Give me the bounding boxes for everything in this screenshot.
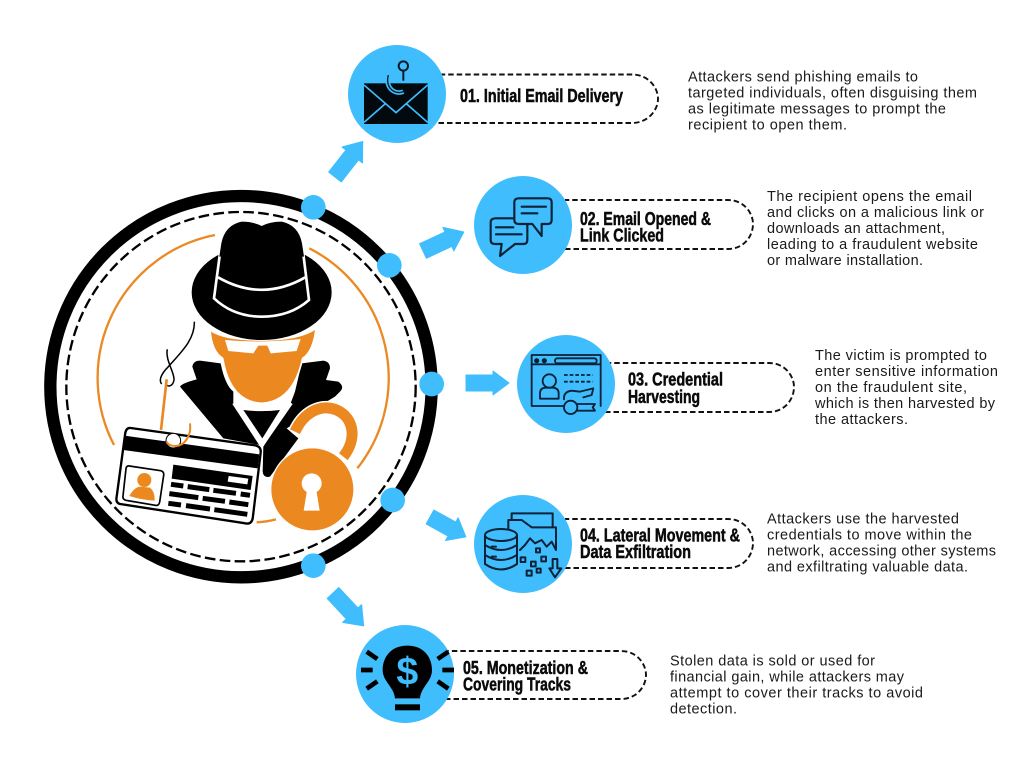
description 1: recipient to open them. [688, 118, 847, 134]
icon: dollar lightbulb: $ [396, 650, 418, 694]
description 4: Attackers use the harvested [767, 512, 959, 528]
description 5: attempt to cover their tracks to avoid [670, 686, 923, 702]
description 1: targeted individuals, often disguising them [688, 86, 977, 102]
heading 3: 03. Credential [628, 370, 723, 390]
description 3: the attackers. [815, 412, 908, 428]
heading pill 2 [565, 200, 753, 249]
description 5: detection. [670, 702, 737, 718]
description 2: downloads an attachment, [767, 221, 945, 237]
description 4: credentials to move within the [767, 528, 972, 544]
heading 4: 04. Lateral Movement & [580, 526, 740, 546]
description 5: Stolen data is sold or used for [670, 654, 875, 670]
heading pill 5 [445, 651, 646, 699]
heading 5 [463, 658, 588, 694]
heading 4: Data Exfiltration [580, 542, 691, 562]
description 2: leading to a fraudulent website [767, 237, 978, 253]
open padlock [271, 408, 354, 531]
description 5 [670, 654, 923, 718]
arrow: to step 2 [418, 220, 469, 263]
panel: central hacker emblem [50, 195, 444, 578]
heading 5: 05. Monetization & [463, 658, 588, 678]
heading 5: Covering Tracks [463, 674, 571, 694]
hacker figure [180, 222, 342, 477]
description 4: and exfiltrating valuable data. [767, 560, 968, 576]
heading 4 [580, 526, 740, 562]
description 5: financial gain, while attackers may [670, 670, 905, 686]
arrow: to step 4 [424, 506, 472, 548]
heading pill 3 [605, 363, 794, 412]
icon: login window and keys [517, 335, 615, 433]
description 2: The recipient opens the email [767, 189, 972, 205]
icon: database and folder breach [474, 495, 572, 593]
heading pill 4 [565, 519, 753, 568]
identity card [116, 423, 261, 524]
orange arcs [98, 235, 389, 522]
heading 2 [580, 209, 711, 246]
heading 2: Link Clicked [580, 226, 664, 246]
arrow: to step 1 [325, 134, 373, 185]
description 4: network, accessing other systems [767, 544, 996, 560]
description 1 [688, 70, 977, 134]
hook through card hole [166, 423, 190, 448]
heading 2: 02. Email Opened & [580, 209, 711, 229]
description 3: which is then harvested by [814, 396, 996, 412]
icon: phishing envelope [348, 45, 446, 143]
arrow: to step 3 [466, 371, 509, 395]
icon: dollar lightbulb [356, 625, 454, 723]
arrow: to step 5 [323, 584, 373, 635]
panel: step 1 [348, 45, 977, 143]
description 3: on the fraudulent site, [815, 380, 967, 396]
card photo [123, 466, 164, 505]
description 3 [814, 348, 998, 428]
heading 3 [628, 370, 723, 407]
description 3: The victim is prompted to [815, 348, 987, 364]
panel: step 2 [474, 176, 984, 274]
panel: step 4 [474, 495, 996, 593]
timeline node dots [301, 195, 444, 578]
description 1: as legitimate messages to prompt the [688, 102, 946, 118]
description 4 [767, 512, 996, 576]
description 3: enter sensitive information [815, 364, 998, 380]
description 2: and clicks on a malicious link or [767, 205, 984, 221]
card data lines [168, 465, 253, 514]
fishing line and hook [160, 322, 194, 430]
icon: chat bubbles [474, 176, 572, 274]
heading pill 1 [430, 74, 658, 123]
outer black ring [50, 196, 432, 577]
description 1: Attackers send phishing emails to [688, 70, 918, 86]
heading 3: Harvesting [628, 387, 700, 407]
description 2 [767, 189, 984, 269]
dashed inner ring [66, 212, 416, 561]
description 2: or malware installation. [767, 253, 923, 269]
panel: step 3 [517, 335, 998, 433]
panel: step 5 [356, 625, 923, 723]
heading 1: 01. Initial Email Delivery [460, 86, 623, 106]
